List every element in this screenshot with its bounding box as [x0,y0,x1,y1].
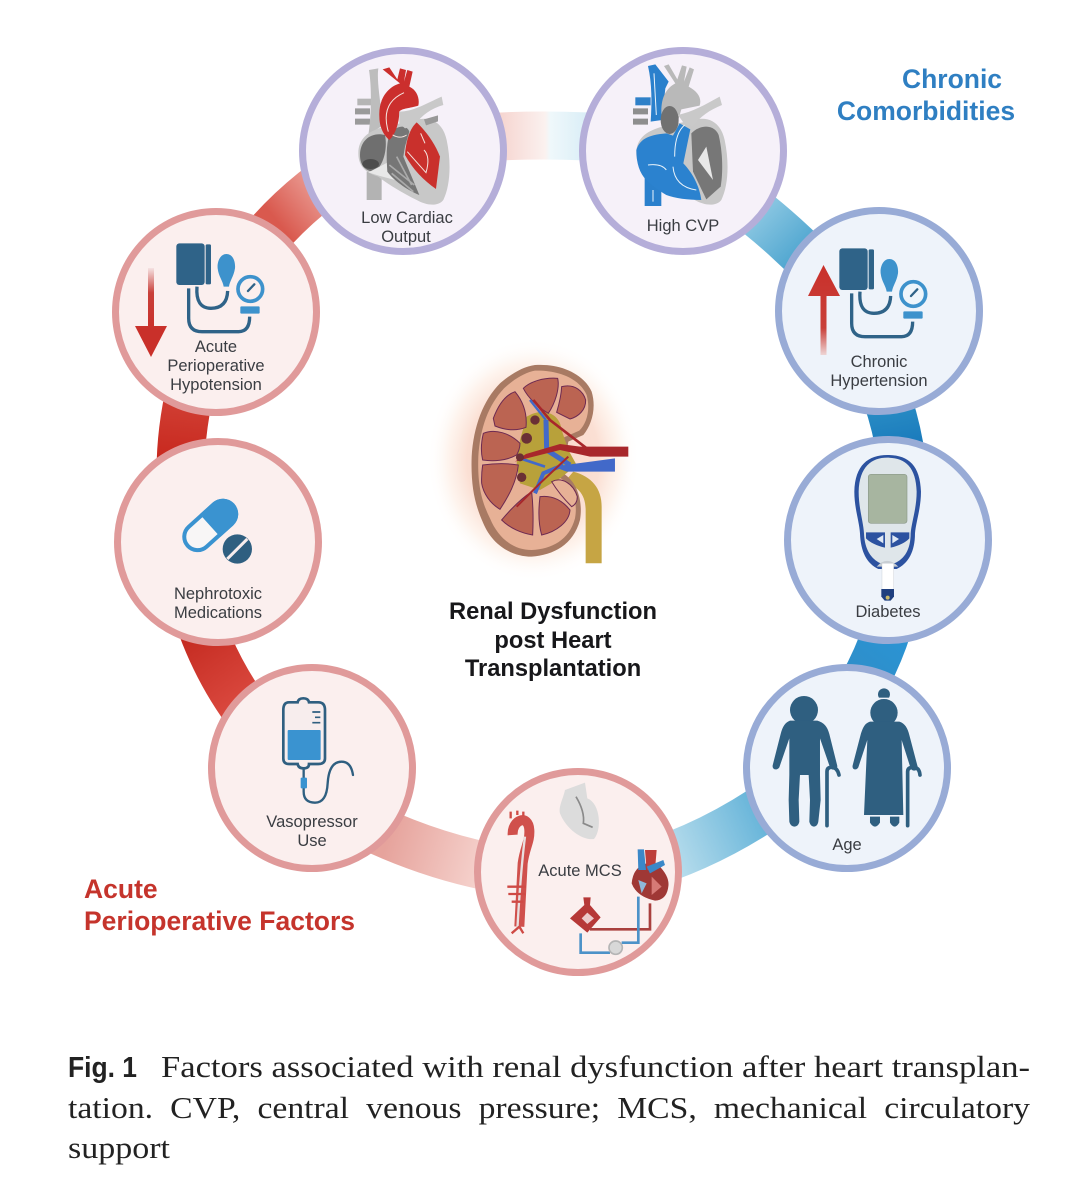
label: Age [832,836,862,854]
label: Acute MCS [538,862,622,880]
label [174,585,262,622]
ureter [563,472,602,563]
icon: blood pressure cuff [176,243,263,332]
label [266,813,358,850]
label: Acute [195,338,237,356]
icon: blood pressure cuff [839,248,926,337]
label: Medications [174,604,262,622]
central title: post Heart [494,628,612,654]
figure caption: Factors associated with renal dysfunction after heart transplan- [161,1049,1030,1084]
figure caption [68,1049,1031,1165]
label: Vasopressor [266,813,358,831]
icon: arrow down [135,268,167,357]
central title: Transplantation [465,656,641,682]
renal sinus [517,412,577,490]
heading: chronic comorbidities: Chronic [902,64,1002,94]
renal vein [520,400,570,493]
factor: age [746,668,948,868]
kidney glow [427,338,640,582]
label [167,338,265,394]
figure caption: Fig. 1 [68,1052,137,1084]
label: Perioperative [167,357,265,375]
central kidney illustration [427,338,640,582]
icon: elderly couple [773,688,920,827]
label [361,209,453,246]
ring connecting the factors [181,136,905,872]
heading: acute perioperative factors: Perioperative Factors [84,906,355,936]
label: Hypertension [830,372,928,390]
label: Chronic [851,353,907,371]
factor: acute perioperative hypotension [116,212,316,412]
icon: mechanical circulatory support devices [507,783,669,954]
factor: diabetes [788,440,988,640]
heading: chronic comorbidities: Comorbidities [837,96,1015,126]
icon: heart with blue right side [633,64,728,206]
factor: chronic hypertension [778,210,980,412]
central title [449,599,657,682]
icon: glucose meter [854,455,921,601]
label: High CVP [647,217,719,235]
heading: acute perioperative factors: Acute [84,874,158,904]
icon: capsule and tablet [177,492,252,564]
icon: heart with red left side [355,67,450,205]
figure caption: support [68,1130,170,1165]
label [830,353,928,390]
central title: Renal Dysfunction [449,599,657,625]
label: Hypotension [170,376,262,394]
heading: acute perioperative factors [84,874,355,936]
renal artery [515,444,628,462]
label: Output [381,228,431,246]
figure caption: tation. CVP, central venous pressure; MCS, mechanical circulatory [68,1090,1031,1125]
factor: high CVP [582,50,784,252]
heading: chronic comorbidities [837,64,1015,126]
factor: nephrotoxic medications [118,442,318,642]
factor: vasopressor use [212,668,412,868]
label: Nephrotoxic [174,585,262,603]
factor: low cardiac output [302,50,504,252]
icon: arrow up [808,265,840,355]
icon: IV bag and line [283,698,353,803]
kidney body [472,365,594,557]
label: Use [297,832,327,850]
label: Diabetes [855,603,921,621]
renal pyramids [481,378,586,535]
factor: acute MCS [478,772,678,972]
label: Low Cardiac [361,209,453,227]
